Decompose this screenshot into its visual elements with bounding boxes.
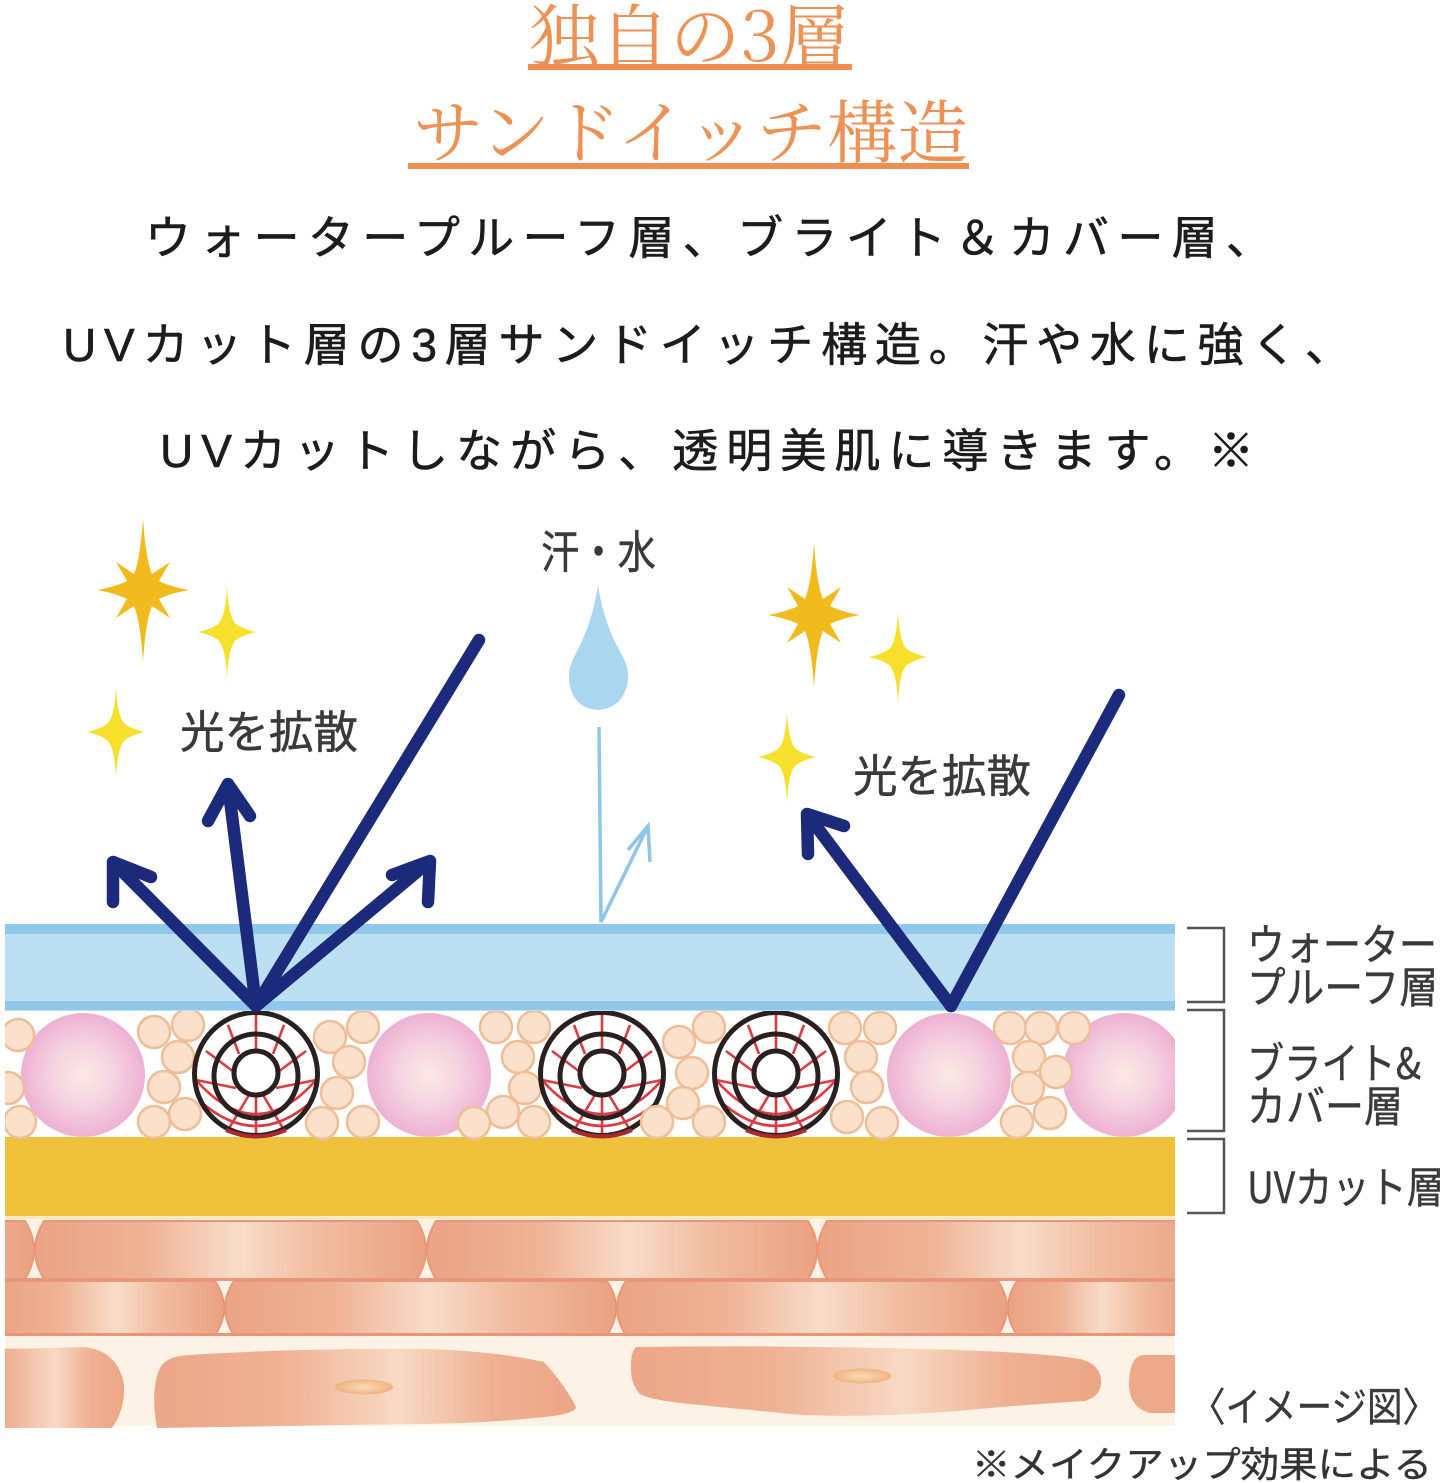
label: bright and cover layer <box>1247 1030 1421 1135</box>
water proof layer <box>5 924 1175 1011</box>
bright and cover layer particles <box>0 1009 1186 1139</box>
arrows: light diffusion left <box>113 640 479 1006</box>
label: bright and cover layer: ブライト& <box>1247 1030 1421 1092</box>
brackets <box>1187 928 1224 1213</box>
icon: water drop <box>569 585 628 710</box>
description text: UVカットしながら、透明美肌に導きます。※ <box>160 425 1254 477</box>
title line 2: サンドイッチ構造 <box>413 78 968 177</box>
icon: sparkles left <box>87 518 256 778</box>
label: light diffusion right: 光を拡散 <box>853 740 1031 805</box>
uv cut layer <box>5 1137 1175 1219</box>
description text: UVカット層の3層サンドイッチ構造。汗や水に強く、 <box>63 319 1351 371</box>
description text <box>63 212 1351 477</box>
label: bright and cover layer: カバー層 <box>1247 1073 1403 1135</box>
label: water proof layer <box>1247 911 1438 1016</box>
arrow: water repelled <box>599 727 650 922</box>
description text: ウォータープルーフ層、ブライト＆カバー層、 <box>145 212 1272 264</box>
icon: sparkles right <box>758 543 927 803</box>
arrows: light diffusion right <box>807 695 1119 1006</box>
skin cell layers <box>0 1218 1209 1428</box>
label: light diffusion left: 光を拡散 <box>180 696 358 761</box>
label: sweat and water: 汗・水 <box>541 516 656 581</box>
